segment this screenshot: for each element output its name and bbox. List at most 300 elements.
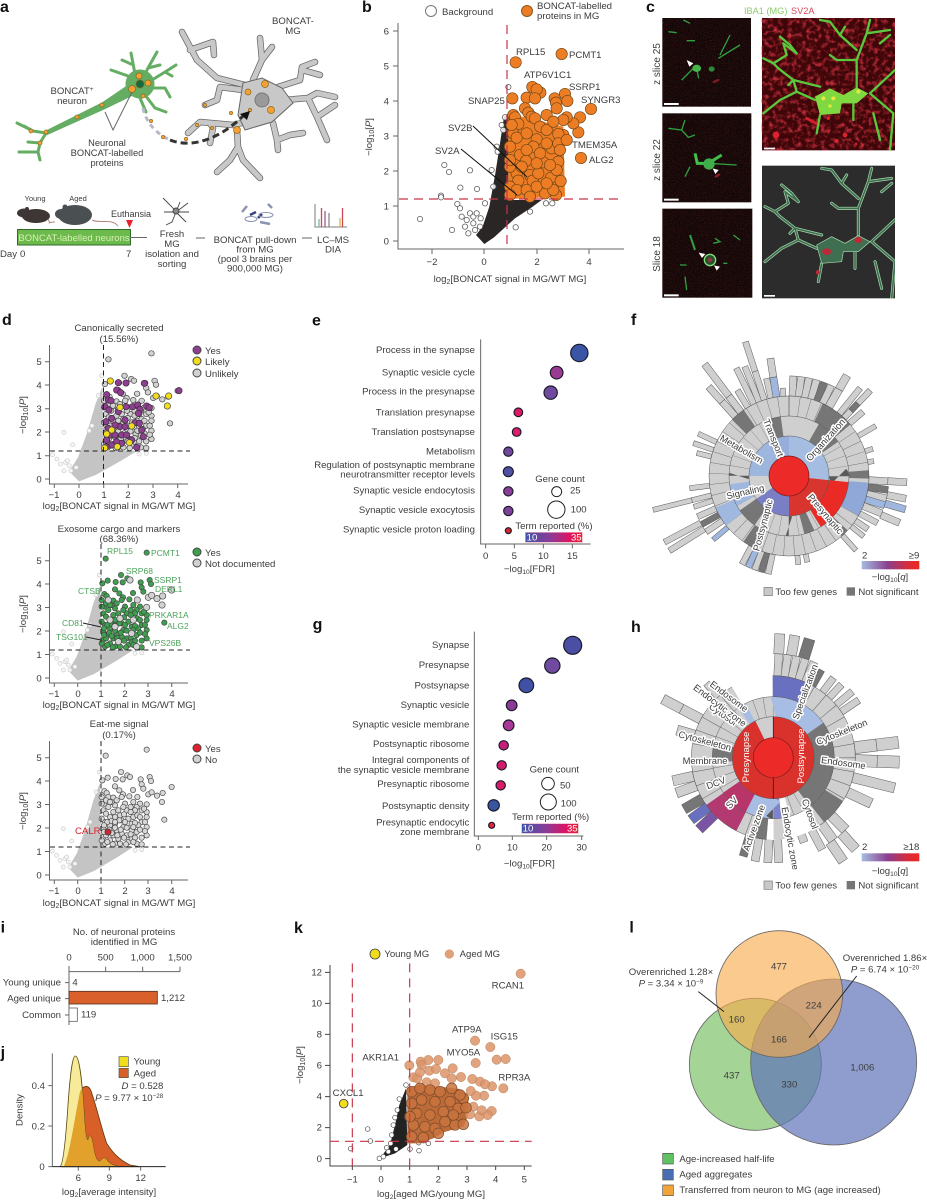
callout 1.86x: −20	[908, 964, 920, 971]
legend	[193, 548, 275, 570]
protein labels: SV2B	[448, 123, 473, 134]
axis titles: [BONCAT signal in MG/WT MG]	[450, 274, 586, 285]
gene labels: PRKAR1A	[149, 610, 189, 620]
term labels: Synaptic vesicle	[401, 700, 469, 711]
BONCAT+ neuron label: BONCAT	[50, 86, 90, 97]
protein labels: RPR3A	[498, 1073, 531, 1084]
x title: −log	[504, 564, 522, 575]
venn counts: 437	[724, 1070, 740, 1081]
legend: Young MG	[384, 949, 429, 960]
venn counts: 166	[771, 1034, 787, 1045]
step: MG isolation: MG	[164, 239, 180, 250]
tick labels: 0	[36, 474, 42, 486]
microglia cell	[182, 32, 335, 178]
3D surface rendering	[762, 166, 897, 298]
legend: Aged	[134, 1069, 156, 1080]
tick labels: 0	[39, 1162, 45, 1173]
gene labels: DERL1	[155, 584, 183, 594]
term reported colour bar: 35	[571, 532, 582, 543]
legend	[193, 744, 221, 766]
rings	[709, 396, 869, 556]
callout 1.86x	[809, 953, 927, 1038]
term labels: Postsynaptic density	[382, 801, 470, 812]
x tick labels: −2	[427, 257, 437, 268]
y tick labels: 3	[384, 132, 389, 142]
callout 1.28x: −9	[696, 979, 704, 986]
axis titles: 2	[55, 903, 59, 910]
neuronal proteins label: proteins	[90, 158, 124, 168]
tick labels: 4	[169, 886, 175, 897]
x title: 10	[522, 569, 530, 576]
channel title: IBA1 (MG)	[744, 6, 787, 16]
q colour scale: ≥9	[909, 551, 919, 562]
orange labelled proteins	[504, 48, 597, 202]
term labels: Process in the presynapse	[362, 386, 475, 397]
tick labels: 1,000	[131, 953, 155, 964]
tick labels: 5	[36, 753, 42, 764]
confocal close-up	[762, 18, 895, 150]
labelling bar: BONCAT-labelled neurons	[18, 233, 130, 244]
gene count legend	[535, 474, 587, 518]
sector labels: Signaling	[725, 482, 765, 501]
venn counts: 477	[771, 962, 787, 973]
CXCL1 point	[339, 1099, 348, 1108]
panel f: sunburst	[631, 312, 919, 598]
gene labels: PCMT1	[151, 548, 180, 558]
title: Canonically secreted	[74, 323, 164, 334]
gene count legend: 100	[571, 504, 587, 515]
term labels: Presynaptic ribosome	[377, 779, 469, 790]
neuron nucleus and orange protein dots	[29, 73, 151, 145]
protein labels: RCAN1	[492, 981, 524, 992]
day axis: Day	[0, 249, 17, 260]
legend	[426, 1, 612, 22]
chart title: identified in MG	[91, 937, 157, 948]
term reported colour bar: Term reported (%)	[512, 812, 589, 823]
sector labels: Membrane	[683, 755, 727, 766]
neuronal proteins label: BONCAT-labelled	[71, 148, 143, 158]
sector labels: SV	[723, 794, 740, 811]
tick labels: 500	[98, 953, 114, 964]
axes	[48, 1053, 141, 1171]
gene labels: SRP68	[126, 566, 153, 576]
leader lines	[83, 623, 101, 640]
tick labels: 0	[75, 689, 81, 700]
statistics: D = 0.528	[122, 1081, 163, 1092]
y axis labels: 12	[311, 968, 322, 978]
axes	[393, 23, 624, 254]
gene count legend: Gene count	[535, 474, 585, 485]
tick labels: 2	[122, 689, 128, 700]
tick labels: −1	[49, 490, 59, 501]
tick labels: 2	[36, 428, 42, 438]
term labels: neurotransmitter receptor levels	[340, 469, 475, 480]
statistics: P = 9.77 × 10	[95, 1093, 153, 1104]
y axis title: P]	[364, 118, 375, 127]
sunburst chart	[653, 341, 907, 574]
q colour scale	[862, 551, 919, 584]
CALR point: CALR	[75, 826, 101, 837]
gene count legend	[530, 765, 579, 810]
y title: [	[18, 801, 29, 804]
purple yes points	[102, 379, 182, 450]
panel c: microscopy images	[646, 0, 897, 298]
sector labels: Metabolism	[718, 432, 765, 466]
step: LC-MS: DIA	[325, 244, 342, 256]
y title: −log	[18, 812, 29, 830]
panel letter f: f	[631, 312, 637, 329]
gene labels: SSRP1	[154, 575, 182, 585]
neuronal proteins label: Neuronal	[88, 138, 126, 148]
euthansia marker	[111, 209, 151, 228]
y title: [	[18, 405, 29, 408]
axis titles: log	[434, 274, 446, 285]
term labels: Postsynapse	[414, 680, 469, 691]
y tick labels: 5	[384, 62, 389, 72]
venn counts: 330	[781, 1080, 797, 1091]
legend: Aged MG	[460, 949, 500, 960]
legend	[119, 1057, 160, 1080]
term labels: Synapse	[432, 640, 469, 651]
step: pull-down: from MG	[236, 244, 274, 256]
y title: P]	[18, 792, 29, 801]
callout 1.86x: P = 6.74 × 10	[851, 964, 908, 975]
x tick labels: 10	[507, 843, 518, 854]
sector labels: Endocytic zone	[780, 806, 801, 871]
panel d: annotated volcano plots	[2, 312, 275, 910]
gene legend: Not significant	[858, 587, 919, 598]
x title: [FDR]	[530, 858, 555, 869]
term reported colour bar	[515, 521, 593, 543]
x tick labels: 0	[476, 843, 481, 854]
y tick labels: 1	[384, 202, 389, 212]
BONCAT+ neuron	[17, 52, 176, 160]
y title: P]	[295, 1046, 306, 1055]
q colour scale: 2	[862, 551, 867, 562]
legend: Not documented	[205, 559, 275, 570]
category labels: Aged unique	[7, 994, 61, 1005]
protein labels: RPL15	[516, 47, 545, 58]
term reported colour bar: Term reported (%)	[515, 521, 593, 532]
young mouse	[17, 207, 55, 223]
legend	[370, 949, 500, 960]
plot: canonically secreted	[18, 323, 239, 513]
slice labels	[652, 43, 663, 272]
x tick labels: 0	[481, 257, 487, 268]
micrograph slice 22	[662, 113, 751, 202]
sector labels: Postsynaptic	[750, 498, 775, 552]
axis titles: [BONCAT signal in MG/WT MG]	[59, 898, 195, 909]
bubbles	[503, 344, 588, 534]
x title: [aged MG/young MG]	[393, 1189, 485, 1200]
x tick labels: 20	[541, 843, 552, 854]
term reported colour bar: 10	[523, 824, 533, 835]
term labels: the synaptic vesicle membrane	[338, 765, 469, 776]
microglia icon	[163, 198, 189, 225]
x tick labels: 6	[76, 1173, 81, 1184]
term reported colour bar	[512, 812, 589, 835]
tick labels: 2	[122, 886, 128, 897]
protein labels: SYNGR3	[581, 95, 620, 106]
legend: Yes	[205, 346, 221, 357]
tick labels: 3	[145, 689, 151, 700]
q colour scale: [	[898, 866, 901, 877]
category labels: Young unique	[3, 978, 61, 989]
heading: BONCAT- MG: BONCAT-	[272, 16, 314, 27]
gene labels: CTSB	[78, 586, 101, 596]
q colour scale: ≥18	[903, 842, 919, 853]
day axis: 7	[126, 249, 131, 260]
sector labels	[718, 416, 847, 552]
step: MG isolation: sorting	[158, 259, 186, 270]
panel letter j: j	[0, 1044, 5, 1061]
protein labels: ISG15	[491, 1031, 518, 1042]
q colour scale: [	[898, 572, 901, 583]
term labels: Synaptic vesicle endocytosis	[353, 485, 475, 496]
points	[50, 747, 174, 878]
threshold lines	[50, 345, 190, 484]
panel letter l: l	[629, 920, 634, 937]
bar values: 4	[72, 978, 78, 989]
term labels: Translation presynapse	[376, 407, 475, 418]
sector labels: Active zone	[740, 803, 767, 852]
axes	[481, 339, 591, 548]
panel j: density plot	[0, 1044, 166, 1199]
sector labels: Specialization	[790, 663, 820, 721]
term labels: Metabolism	[426, 447, 475, 458]
term labels: Process in the synapse	[376, 345, 475, 356]
legend: Age-increased half-life	[679, 1154, 775, 1165]
bars	[69, 991, 157, 1021]
axes	[474, 632, 583, 840]
gene count legend: 25	[570, 486, 581, 497]
legend: BONCAT-labelled	[537, 1, 612, 12]
y tick labels: 4	[384, 96, 390, 108]
x tick labels: 4	[586, 257, 592, 268]
tick labels: 4	[175, 490, 181, 501]
gene legend: Not significant	[858, 881, 919, 892]
panel letter d: d	[2, 312, 12, 329]
BONCAT+ neuron label: neuron	[57, 96, 87, 107]
tick labels: 2	[436, 1174, 441, 1185]
tick labels: 4	[493, 1174, 499, 1185]
tick labels: 5	[36, 357, 42, 368]
title: Exosome cargo and markers	[58, 524, 180, 535]
y title: 10	[23, 804, 30, 812]
axis titles: log	[43, 501, 55, 512]
tick labels: 1	[36, 650, 42, 661]
chart title: No. of neuronal proteins	[73, 927, 175, 938]
venn counts: 224	[806, 1001, 822, 1012]
category labels: Common	[22, 1010, 61, 1021]
term labels: Synaptic vesicle proton loading	[343, 525, 475, 536]
y title: Density	[15, 1094, 26, 1126]
callout 1.28x	[629, 967, 724, 1012]
density curves	[60, 1056, 140, 1167]
pull-down icon	[242, 204, 273, 224]
tick labels: 0	[378, 1174, 384, 1185]
channel title: SV2A	[791, 6, 815, 16]
tick labels: 5	[522, 1174, 527, 1185]
y axis title: 10	[369, 130, 376, 138]
y title: −log	[295, 1066, 306, 1084]
sector labels: Cytosol	[800, 797, 821, 830]
gene count legend: 50	[560, 780, 571, 791]
term labels: Translation postsynapse	[372, 427, 475, 438]
x tick labels: 0	[483, 551, 488, 562]
title: (0.17%)	[102, 730, 136, 741]
tick labels: 0	[36, 674, 42, 684]
LC-MS spectrum icon	[315, 204, 347, 227]
euthansia marker: Euthansia	[111, 209, 151, 219]
points	[50, 550, 175, 681]
free orange proteins	[149, 111, 233, 141]
legend: Likely	[205, 357, 230, 368]
y title: [	[18, 604, 29, 607]
x title: 10	[522, 863, 530, 870]
bar values: 1,212	[161, 993, 185, 1004]
tick labels: −1	[347, 1174, 358, 1185]
axis titles: [BONCAT signal in MG/WT MG]	[59, 501, 195, 512]
tick labels: 1	[407, 1174, 412, 1185]
threshold lines	[50, 544, 190, 683]
tick labels: 2	[125, 490, 131, 501]
tick labels: 1	[101, 490, 107, 501]
sector labels: Presynaptic	[806, 491, 846, 536]
callout 1.86x: Overenriched 1.86×	[843, 953, 927, 964]
outer spikes	[653, 341, 907, 574]
protein labels: CXCL1	[333, 1088, 364, 1099]
gene legend: Too few genes	[775, 881, 837, 892]
sector labels: DCV	[705, 774, 728, 791]
q colour scale: −log	[872, 572, 890, 583]
protein labels: ATP9A	[452, 1025, 482, 1036]
panel b: volcano plot	[362, 0, 624, 286]
pointer lines to labelled proteins	[105, 92, 132, 130]
protein labels: PCMT1	[569, 50, 602, 61]
legend: proteins in MG	[537, 11, 599, 22]
threshold lines	[330, 963, 532, 1166]
y title: 10	[23, 607, 30, 615]
axis titles: [BONCAT signal in MG/WT MG]	[59, 700, 195, 711]
tick labels: 3	[36, 603, 42, 614]
y title: 10	[300, 1058, 307, 1066]
panel letter k: k	[294, 920, 303, 937]
x tick labels: 12	[135, 1173, 146, 1184]
q colour scale: q]	[900, 572, 908, 583]
x title: log	[377, 1189, 390, 1200]
protein labels: SSRP1	[569, 82, 600, 93]
gene labels: VPS26B	[149, 638, 181, 648]
term labels: Synaptic vesicle membrane	[352, 719, 469, 730]
y title: 10	[23, 408, 30, 416]
tick labels: 1	[36, 847, 42, 858]
q colour scale	[862, 842, 919, 878]
unchanged points	[348, 1083, 431, 1161]
venn counts: 1,006	[850, 1063, 874, 1074]
venn circles	[689, 931, 917, 1145]
center	[769, 456, 809, 496]
gene labels: CD81	[62, 618, 84, 628]
legend: Aged aggregates	[679, 1170, 753, 1181]
plot: exosome cargo	[18, 524, 275, 712]
legend: Background	[442, 7, 493, 18]
y axis labels: 10	[311, 998, 322, 1010]
term labels: Regulation of postsynaptic membrane	[314, 460, 475, 471]
aged MG points	[405, 969, 525, 1143]
tick labels: 3	[145, 886, 151, 897]
y axis labels: 4	[317, 1092, 323, 1102]
term labels: zone membrane	[400, 827, 469, 838]
axis titles: 2	[55, 506, 59, 513]
protein labels: ATP6V1C1	[524, 70, 571, 81]
slice labels: z slice 22	[652, 139, 663, 181]
axis titles: log	[43, 700, 55, 711]
panel i: bar chart	[1, 920, 192, 1025]
gene labels: TSG101	[56, 632, 88, 642]
step: pull-down: BONCAT pull-down	[214, 235, 296, 246]
legend: Young	[134, 1057, 160, 1068]
labelling bar	[18, 230, 130, 245]
y axis labels: 6	[317, 1060, 322, 1072]
legend	[663, 1153, 881, 1196]
q colour scale: 2	[862, 842, 867, 853]
x title: [FDR]	[530, 564, 555, 575]
y title: −log	[18, 615, 29, 633]
protein labels: TMEM35A	[572, 140, 618, 151]
tick labels: 0	[76, 490, 82, 501]
y axis labels: 8	[317, 1030, 322, 1040]
gene labels: RPL15	[107, 546, 133, 556]
tick labels: 2	[36, 824, 42, 834]
scatter background	[417, 84, 555, 244]
axes	[65, 966, 180, 1025]
tick labels: 1,500	[168, 953, 192, 964]
step: LC-MS: LC–MS	[317, 235, 349, 246]
y title: P]	[18, 595, 29, 604]
y tick labels: 0	[384, 236, 389, 248]
sector labels: Endosome	[708, 678, 750, 714]
sector labels	[677, 663, 869, 871]
protein labels: MYO5A	[447, 1048, 481, 1059]
y title: −log	[18, 416, 29, 434]
axis titles: log	[43, 898, 55, 909]
gene legend	[764, 881, 919, 892]
y title: [	[295, 1055, 306, 1058]
tick labels: 1	[98, 689, 104, 700]
step: pull-down: 900,000 MG)	[227, 264, 283, 274]
protein labels: SV2A	[435, 146, 460, 157]
y axis labels: 0	[317, 1154, 322, 1165]
tick labels: 0	[36, 870, 42, 882]
heading: BONCAT- MG: MG	[285, 26, 301, 37]
aged mouse	[55, 204, 118, 226]
tick labels: 0	[75, 886, 81, 897]
connector dash	[196, 237, 205, 239]
x tick labels: 30	[576, 843, 587, 854]
gene count legend: 100	[561, 799, 577, 810]
term labels: Synaptic vesicle cycle	[382, 368, 475, 379]
panel letter i: i	[1, 920, 5, 937]
red threshold lines	[399, 25, 624, 249]
axes	[45, 544, 188, 687]
gene labels: ALG2	[167, 621, 189, 631]
title: (15.56%)	[100, 334, 138, 345]
panel k: volcano plot	[294, 920, 532, 1200]
legend	[193, 346, 239, 380]
day axis	[0, 238, 147, 260]
panel letter h: h	[631, 619, 641, 636]
